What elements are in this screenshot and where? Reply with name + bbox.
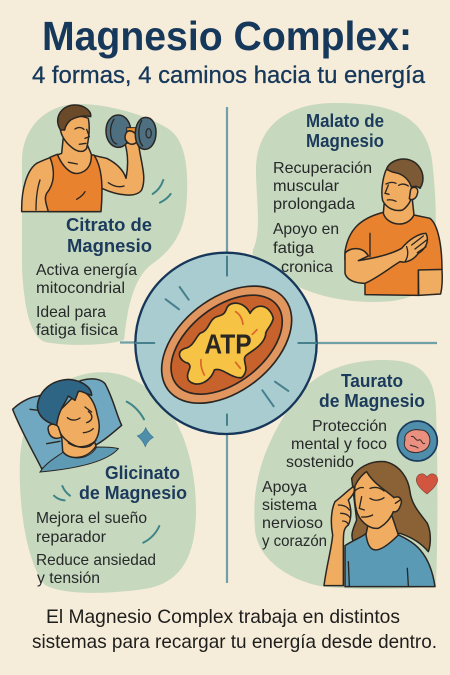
benefits text: y corazón <box>262 533 327 550</box>
heading: Malato de <box>306 110 384 131</box>
footer text <box>32 606 437 653</box>
benefits text: mental y foco <box>291 436 387 453</box>
benefits text: prolongada <box>273 196 355 213</box>
illustration: sleeping person on pillow <box>13 379 122 472</box>
benefits text: cronica <box>281 259 333 276</box>
heading <box>79 462 187 503</box>
benefits text <box>36 262 137 339</box>
benefits text: y tensión <box>37 570 100 587</box>
panel: glicinato de magnesio <box>13 372 196 593</box>
benefits text: Ideal para <box>36 304 106 321</box>
panel: citrato de magnesio <box>22 104 187 345</box>
benefits text: fatiga fisica <box>36 322 118 339</box>
heading: Glicinato <box>105 462 180 483</box>
icon: heart <box>416 474 438 494</box>
benefits text: Apoyo en <box>273 221 339 238</box>
central mitochondria circle <box>135 253 317 434</box>
benefits text <box>273 160 372 276</box>
benefits text: Protección <box>312 418 387 435</box>
benefits text <box>36 510 156 587</box>
benefits text: mitocondrial <box>36 280 125 297</box>
heading: Magnesio <box>67 235 152 256</box>
benefits text: fatiga <box>273 240 314 257</box>
benefits text: Apoya <box>262 479 307 496</box>
panel: taurato de magnesio <box>254 360 438 589</box>
panel: malato de magnesio <box>253 103 442 302</box>
label: ATP: ATP <box>204 328 252 359</box>
heading: Magnesio <box>306 130 384 151</box>
motion marks <box>153 180 171 203</box>
footer text: sistemas para recargar tu energía desde dentro. <box>32 631 437 653</box>
benefits text: Activa energía <box>36 262 137 279</box>
ticks <box>136 257 316 425</box>
heading: de Magnesio <box>319 390 425 411</box>
heading <box>306 110 384 151</box>
benefits text: Reduce ansiedad <box>36 552 156 569</box>
illustration: woman touching temple <box>324 461 435 587</box>
heading: Citrato de <box>66 214 152 235</box>
heading <box>319 370 425 411</box>
icon: brain <box>397 421 437 461</box>
heading <box>66 214 152 256</box>
benefits text: muscular <box>273 178 340 195</box>
cross divider lines <box>120 107 437 583</box>
mitochondrion <box>140 262 314 427</box>
benefits text: sostenido <box>286 454 354 471</box>
benefits text: sistema <box>262 497 317 514</box>
benefits text: Mejora el sueño <box>36 510 147 527</box>
benefits text: nervioso <box>262 515 323 532</box>
heading: Taurato <box>341 370 403 391</box>
benefits text: Recuperación <box>273 160 372 177</box>
subtitle: 4 formas, 4 caminos hacia tu energía <box>32 62 426 89</box>
benefits text <box>262 418 387 550</box>
illustration: man lifting dumbbell <box>22 105 156 212</box>
illustration: man with hand on chest <box>345 159 442 295</box>
footer text: El Magnesio Complex trabaja en distintos <box>46 606 400 628</box>
sparkle and sleep marks <box>54 402 159 543</box>
title: Magnesio Complex: <box>42 13 412 59</box>
heading: de Magnesio <box>79 482 187 503</box>
benefits text: reparador <box>36 529 107 546</box>
